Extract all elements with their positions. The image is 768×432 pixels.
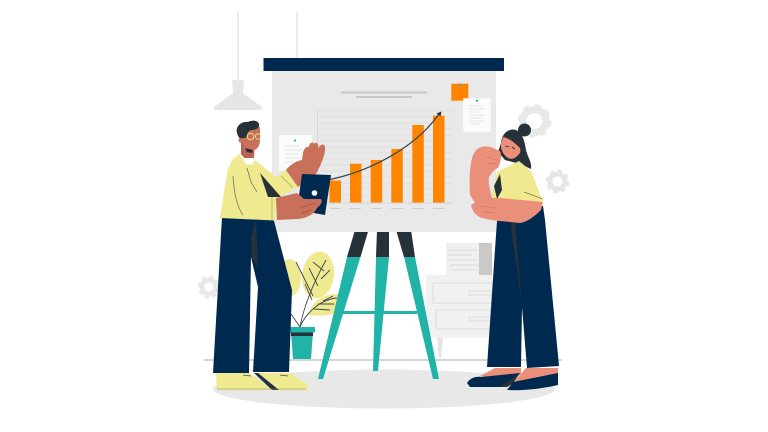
man glasses xyxy=(247,133,261,140)
woman feet xyxy=(480,368,521,380)
man shoes xyxy=(216,373,272,390)
gear: upper right xyxy=(520,107,548,135)
easel xyxy=(318,230,439,379)
note paper left xyxy=(279,135,312,171)
man collar xyxy=(238,153,247,166)
man shirt xyxy=(220,154,298,220)
floor shadow xyxy=(213,370,555,408)
woman trousers xyxy=(487,206,559,368)
chart title lines xyxy=(341,92,427,98)
woman presenter xyxy=(467,124,559,390)
man trousers xyxy=(213,217,292,373)
man hair xyxy=(237,121,259,138)
man tie xyxy=(260,173,281,197)
sticky note xyxy=(451,84,468,101)
man raised hand xyxy=(286,143,325,187)
chart grid xyxy=(317,110,453,203)
plant xyxy=(277,250,342,359)
bar chart xyxy=(330,116,444,202)
woman shoes xyxy=(467,373,520,387)
cabinet with papers xyxy=(426,243,493,358)
woman shirt xyxy=(492,161,543,202)
gear: lower right xyxy=(548,172,568,192)
note paper right xyxy=(463,98,491,132)
man tablet xyxy=(297,174,331,215)
pendant lamp xyxy=(214,12,262,110)
woman bun and hair xyxy=(518,124,531,136)
man lower hand xyxy=(276,193,322,220)
trend arrow xyxy=(330,112,442,180)
presentation board xyxy=(264,58,504,232)
board top rail xyxy=(264,58,504,71)
woman arm to chin xyxy=(470,146,501,203)
man neck and head xyxy=(241,142,255,158)
woman folded arm xyxy=(471,198,543,223)
man presenter xyxy=(213,121,331,390)
screen hanging cord xyxy=(296,12,298,59)
gear: left xyxy=(200,278,218,296)
axis labels xyxy=(330,208,445,210)
woman face xyxy=(501,137,520,159)
